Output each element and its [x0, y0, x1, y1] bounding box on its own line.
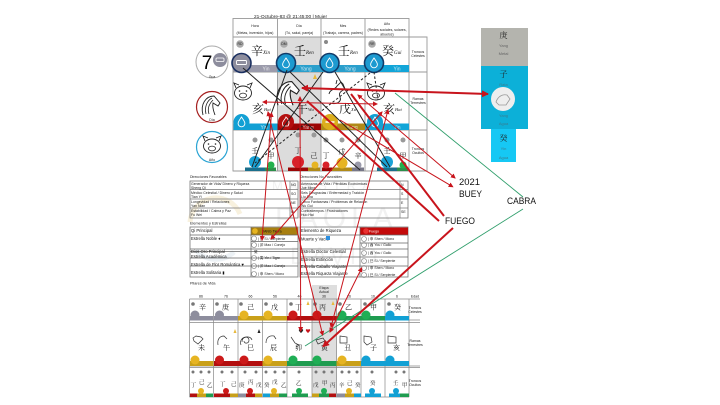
earthly branches: 午: [296, 101, 308, 116]
panel: four pillars table: [232, 18, 427, 171]
earthly branches: Hai: [394, 107, 402, 112]
panel: directions tables: E: [401, 201, 404, 205]
hidden stems: 丁: [294, 147, 302, 155]
branch row: 子: [370, 344, 377, 352]
earthly branches: Hai: [263, 107, 271, 112]
hidden stem row: 癸: [370, 379, 376, 387]
heavenly stems: Yang: [344, 66, 356, 72]
heavenly stems: DM: [281, 42, 287, 46]
panel: elements and stars: Dios Oro Principal: [191, 249, 225, 254]
thick red arrows: [302, 88, 488, 346]
hidden stem row: 己: [231, 380, 237, 388]
age labels: [199, 294, 419, 298]
row labels: Troncos: [412, 147, 425, 151]
panel: directions tables: NO: [291, 183, 297, 187]
icon: Dia horse: [196, 92, 228, 122]
icon: Gua number: 7: [202, 53, 212, 74]
panel: elements and stars: Estrella Noble ♦: [191, 236, 220, 241]
panel: elements and stars: Muerte y Vacío: [301, 236, 330, 242]
chart title: 21-Octubre-83 @ 21:45:00 | Mujer: [254, 14, 327, 20]
panel: directions tables: Huo Hai: [301, 213, 314, 217]
panel: year pillar 2021 side column: Agua: [499, 121, 509, 126]
hidden stem row: [190, 370, 409, 397]
panel: elements and stars: | 申 Shen / Mono: [368, 236, 394, 241]
earthly branches: 戊: [339, 101, 351, 116]
side labels: [407, 306, 423, 387]
age labels: 26: [347, 294, 351, 298]
heavenly stems: 癸: [382, 44, 394, 58]
pillar headers: (Metas, inversión, hijos): [237, 31, 273, 35]
branch row: [190, 329, 409, 366]
current stage tab: 36: [322, 294, 326, 298]
panel: elements and stars: Estrella Doctor Celestial: [301, 249, 346, 254]
panel: directions tables: N: [401, 183, 404, 187]
hidden stems: 辛: [354, 151, 362, 160]
panel: elements and stars: | 寅 Yin / Tigre: [258, 255, 280, 260]
icon: Gua number: [196, 46, 228, 79]
pillar headers: abuelos): [380, 32, 394, 36]
hidden stem row: 庚: [239, 381, 245, 389]
panel: year pillar 2021 side column: Yin: [501, 146, 506, 151]
panel: directions tables: Yan Nian: [191, 204, 205, 208]
age labels: 56: [273, 294, 277, 298]
stem row: 甲: [370, 304, 377, 312]
panel: elements and stars: Estrella de Flor Romántica ♥: [191, 262, 245, 267]
panel: directions tables: S: [401, 192, 404, 196]
panel: elements and stars: Estrella Extinción: [301, 257, 334, 262]
stem row: 辛: [199, 302, 206, 312]
pillar headers: (Tú, salud, pareja): [285, 31, 313, 35]
stem row: 丁: [295, 304, 302, 312]
hidden stems: 丁: [322, 152, 330, 160]
panel: directions tables: O: [291, 210, 294, 214]
panel: elements and stars: | 申 Shen / Mono: [258, 271, 284, 276]
heavenly stems: Ren: [349, 51, 358, 56]
panel: elements and stars: | 巳 Si / Serpiente: [258, 237, 285, 241]
hidden stems: 己: [310, 152, 318, 160]
hidden stems: 壬: [252, 146, 258, 155]
hidden stems: 壬: [384, 146, 390, 155]
stem row: 戊: [271, 302, 278, 312]
side labels: Ramas: [409, 339, 421, 343]
age labels: 66: [249, 294, 252, 298]
hidden stem row: 癸: [355, 381, 361, 389]
branch row: 午: [223, 343, 230, 352]
age labels: 76: [224, 294, 228, 298]
stem row: 乙: [345, 304, 352, 312]
panel: directions tables: SE: [401, 210, 406, 214]
heavenly stems: RD: [237, 42, 243, 46]
row labels: Terrestres: [410, 101, 426, 105]
panel: directions tables: Longevidad / Relaciones: [191, 200, 230, 204]
panel: elements and stars: | 巳 Si / Serpiente: [368, 273, 395, 277]
hidden stem row: 丁: [190, 382, 196, 389]
panel: elements and stars: 癸: [254, 249, 258, 254]
side labels: Terrestres: [407, 343, 423, 347]
panel: directions tables: [190, 175, 408, 218]
panel: elements and stars: | 卯 Mao / Conejo: [258, 263, 285, 268]
row labels: Troncos: [412, 50, 425, 54]
panel: year pillar 2021 side column: 癸: [500, 133, 508, 143]
side labels: Celestes: [408, 310, 422, 314]
watermark: [190, 178, 398, 270]
stem row: 己: [247, 304, 254, 312]
watermark: PAOLA: [275, 202, 398, 235]
panel: year pillar 2021 side column: 子: [500, 70, 508, 79]
panel: elements and stars: Fuego: [369, 230, 379, 234]
pillar headers: Año: [384, 22, 390, 26]
thin red arrows: [262, 95, 455, 335]
panel: elements and stars: Elemento de Riqueza: [301, 228, 342, 233]
earthly branches: Yang: [302, 125, 314, 131]
icon: Gua number: Gua: [209, 75, 215, 79]
heavenly stems: 辛: [251, 44, 263, 58]
panel: directions tables: Contratiempos / Frustraciones: [301, 209, 348, 213]
pillar headers: (Redes sociales, solares,: [367, 28, 407, 32]
hidden stem row: 癸: [264, 381, 270, 389]
branch row: 未: [198, 343, 205, 352]
heavenly stems: [232, 40, 409, 72]
heavenly stems: Gui: [394, 51, 402, 56]
panel: elements and stars: | 巳 Si / Serpiente: [368, 259, 395, 263]
age labels: 6: [396, 294, 398, 298]
panel: year pillar 2021 side column: Agua: [499, 155, 509, 160]
panel: elements and stars: [190, 222, 408, 278]
current stage tab: [319, 286, 329, 298]
heavenly stems: Yang: [300, 66, 312, 72]
branch row: 丑: [344, 344, 351, 352]
hidden stem row: 丁: [220, 381, 226, 388]
pillar headers: Hora: [251, 24, 259, 28]
heavenly stems: Yin: [393, 66, 401, 72]
heading: Pilares de Vida: Pilares de Vida: [190, 282, 216, 286]
panel: directions tables: Direcciones No Favorables: [300, 175, 342, 179]
earthly branches: Yin: [260, 125, 268, 131]
hidden stem row: 乙: [207, 382, 213, 389]
panel: directions tables: NE: [291, 201, 297, 205]
panel: elements and stars: Estrella Solitaria ▮: [191, 270, 225, 275]
earthly branches: 亥: [383, 102, 395, 116]
hidden stem row: 丙: [330, 382, 336, 389]
panel: year pillar 2021 side column: Yang: [499, 113, 508, 118]
panel: directions tables: Estabilidad / Calma y Paz: [191, 209, 231, 213]
hidden stems: 甲: [400, 152, 406, 160]
earthly branches: Wu: [308, 107, 315, 112]
panel: directions tables: Jue Ming: [301, 186, 315, 190]
panel: elements and stars: | 酉 You / Gallo: [368, 243, 391, 247]
panel: elements and stars: Estrella Académica: [191, 254, 227, 259]
panel: year pillar 2021 side column: Rata: [499, 82, 508, 87]
panel: elements and stars: | 酉 You / Gallo: [368, 251, 391, 255]
label: 2021 BUEY: BUEY: [459, 189, 483, 200]
hidden stems: 戊: [338, 147, 346, 156]
hidden stem row: 戊: [313, 381, 319, 389]
row labels: Ramas: [412, 97, 424, 101]
icon: Dia horse: Día: [209, 118, 215, 122]
watermark: MAESTRA: [272, 178, 377, 193]
icon: Año pig: [196, 132, 228, 162]
panel: elements and stars: YANG Tierra: [262, 230, 282, 234]
panel: directions tables: Cinco Fantasmas / Problemas de Relación: [301, 200, 367, 204]
hidden stem row: 戊: [256, 381, 262, 389]
label: FUEGO: FUEGO: [445, 216, 475, 227]
panel: year pillar 2021 side column: Yang: [499, 43, 508, 48]
pillar headers: Día: [296, 24, 302, 28]
stem row: 丙: [319, 304, 326, 312]
branch row: 寅: [321, 343, 329, 352]
earthly branches: Yang: [346, 125, 358, 131]
hidden stem row: 甲: [322, 379, 328, 387]
hidden stem row: 壬: [393, 379, 399, 387]
panel: directions tables: Seis Desgracias / Enfermedad y Traición: [301, 191, 364, 195]
age labels: Edad: [411, 294, 419, 298]
side labels: Ocultos: [409, 383, 421, 387]
panel: directions tables: Fu Wei: [191, 213, 202, 217]
panel: elements and stars: Elementos y Estrellas: [190, 222, 227, 226]
panel: elements and stars: Qi Principal: [191, 228, 212, 233]
label: 2021 BUEY: [459, 177, 483, 200]
hidden stem row: 辛: [339, 381, 345, 389]
earthly branches: Yin: [393, 125, 401, 131]
heavenly stems: 壬: [294, 44, 306, 58]
branch row: 辰: [270, 344, 277, 352]
panel: elements and stars: | 申 Shen / Mono: [368, 265, 394, 270]
panel: directions tables: Amenazas de Vida / Pérdidas Económicas: [301, 182, 367, 186]
panel: year pillar 2021 side column: 庚: [500, 30, 508, 40]
green lines: CABRA: [305, 93, 523, 346]
black clash lines: [243, 68, 390, 170]
panel: elements and stars: Estrella Caballo Viajante: [301, 264, 347, 269]
panel: directions tables: Liu Sha: [301, 195, 313, 199]
age labels: 46: [298, 294, 301, 298]
panel: directions tables: Sheng Qi: [191, 186, 206, 190]
heavenly stems: Yin: [262, 66, 270, 72]
earthly branches: 亥: [252, 102, 264, 116]
row labels: Ocultos: [412, 151, 424, 155]
stem row: 庚: [222, 302, 229, 312]
side labels: Troncos: [409, 379, 422, 383]
hidden stem row: 乙: [281, 382, 287, 389]
heavenly stems: RR: [369, 42, 375, 46]
panel: directions tables: Generador de Vida/ Dinero y Riqueza: [191, 182, 249, 186]
label: 2021 BUEY: 2021: [459, 177, 480, 188]
panel: directions tables: Tian Yi: [191, 195, 202, 199]
panel: directions tables: SO: [291, 192, 296, 196]
earthly branches: Xu: [350, 107, 357, 112]
age labels: 86: [199, 294, 203, 298]
current stage tab: Actual: [319, 290, 329, 294]
panel: year pillar 2021 side column: [481, 28, 528, 162]
label: CABRA: CABRA: [507, 196, 537, 207]
heavenly stems: 壬: [338, 44, 350, 58]
hidden stem row: 己: [199, 378, 205, 386]
panel: directions tables: Médico Celestial / Dinero y Salud: [191, 191, 243, 195]
panel: directions tables: Wu Gui: [301, 204, 313, 208]
current stage tab: Etapa: [319, 286, 329, 290]
heavenly stems: Ren: [305, 51, 314, 56]
icon: Año pig: Año: [209, 158, 215, 162]
hidden stem row: 戊: [272, 378, 278, 386]
row labels: Celestes: [411, 54, 425, 58]
row labels: [410, 50, 426, 155]
panel: year pillar 2021 side column: Metal: [499, 51, 509, 56]
heavenly stems: Xin: [262, 51, 270, 56]
hidden stem row: 己: [347, 379, 353, 387]
panel: directions tables: Direcciones Favorables: [190, 175, 227, 179]
earthly branches: [234, 74, 409, 131]
pillar headers: (Trabajo, carrera, padres): [323, 31, 363, 35]
hidden stem row: 丙: [248, 379, 254, 386]
hidden stems: [245, 132, 408, 171]
stem row: 癸: [394, 304, 401, 312]
age labels: 16: [371, 294, 375, 298]
pillar headers: Mes: [340, 24, 347, 28]
stem row: [190, 301, 409, 320]
hidden stem row: 甲: [402, 381, 408, 389]
side labels: Troncos: [409, 306, 422, 310]
watermark: DAVID: [290, 243, 382, 270]
pillar headers: [237, 22, 407, 36]
branch row: 卯: [295, 343, 302, 352]
panel: elements and stars: | 卯 Mao / Conejo: [258, 242, 285, 247]
panel: elements and stars: Estrella Riqueza Viajante: [301, 271, 348, 276]
panel: life pillars: [190, 285, 423, 397]
hidden stem row: 乙: [296, 380, 302, 387]
hidden stems: 甲: [268, 152, 274, 160]
branch row: 亥: [393, 343, 400, 352]
branch row: 巳: [247, 344, 254, 352]
